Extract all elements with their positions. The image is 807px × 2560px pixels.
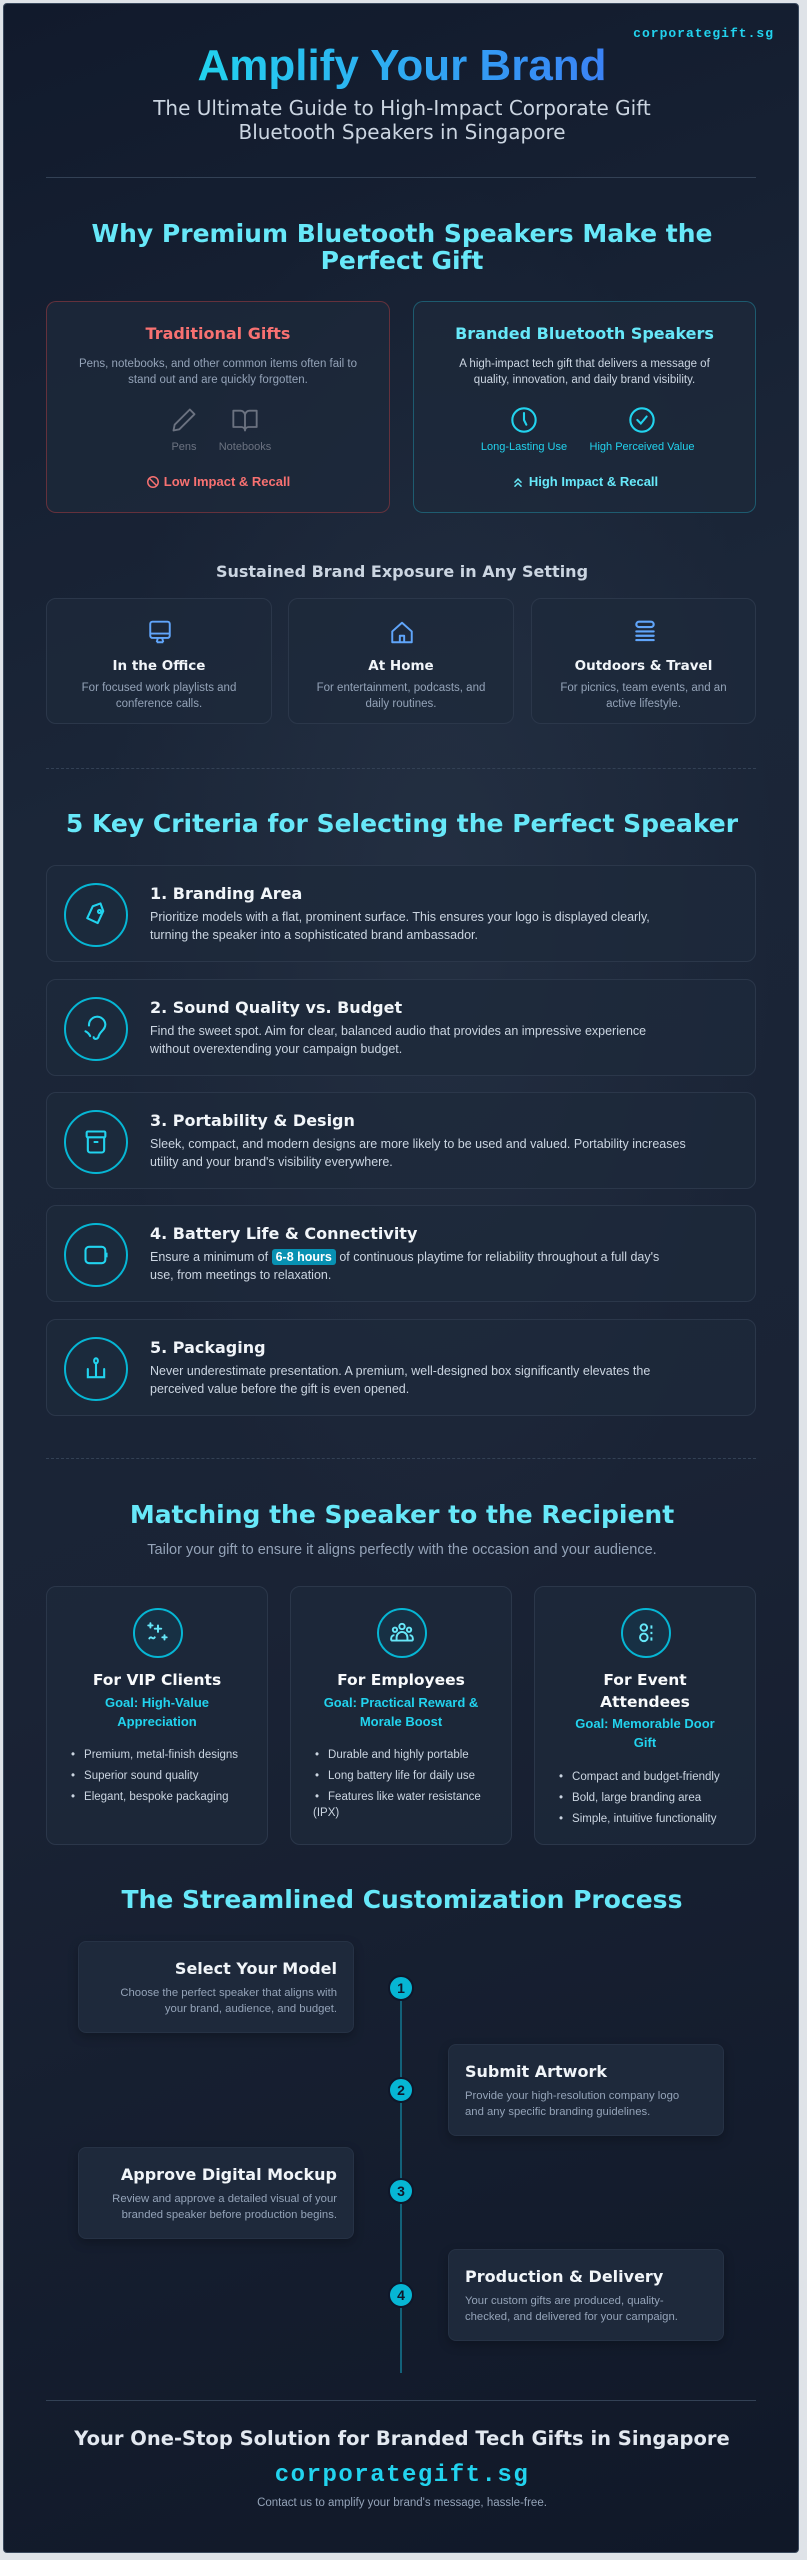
panel: outdoors: active lifestyle. [606,698,681,710]
step 3: Approve Digital Mockup [121,2165,337,2184]
heading: traditional: Traditional Gifts [146,324,290,343]
panel: criterion 5: perceived value before the gift is even opened. [150,1382,409,1396]
panel: employees [290,1586,512,1845]
label: notebooks: Notebooks [219,441,271,453]
step 2: Submit Artwork [465,2062,607,2081]
footer brand: corporategift.sg [275,2462,529,2489]
step 1: your brand, audience, and budget. [165,2003,337,2015]
label: long-lasting: Long-Lasting Use [481,441,567,453]
panel: VIP clients: Goal: High-Value [105,1695,209,1710]
icon: speaker [621,1608,671,1658]
panel: criterion 4: use, from meetings to relaxation. [150,1268,331,1282]
heading: 5 key criteria: 5 Key Criteria for Selecting the Perfect Speaker [66,809,738,838]
icon: tag [64,883,128,947]
marker 4: 4 [397,2287,405,2303]
panel: criterion 1 [46,865,756,962]
panel: VIP clients: Superior sound quality [84,1770,198,1782]
text: home: At Home [368,658,434,674]
icon: monitor [149,620,171,644]
panel: employees: Morale Boost [360,1714,442,1729]
panel: criterion 3: Sleek, compact, and modern designs are more likely to be used and valued. Portability increases [150,1137,686,1151]
panel: criterion 4: 4. Battery Life & Connectivity [150,1224,417,1243]
heading: why premium: Perfect Gift [321,246,483,275]
icon: check [629,407,655,433]
panel: criterion 3: 3. Portability & Design [150,1111,355,1130]
text: traditional desc [79,358,357,386]
step 4: checked, and delivered for your campaign. [465,2311,678,2323]
marker 2: 2 [397,2082,405,2098]
panel: VIP clients: Premium, metal-finish designs [84,1749,238,1761]
panel: VIP clients: Elegant, bespoke packaging [84,1791,229,1803]
panel: criterion 1: 1. Branding Area [150,884,302,903]
panel: event attendees: Bold, large branding area [572,1792,701,1804]
callout: high impact: High Impact & Recall [529,474,658,489]
panel: criterion 3 [46,1092,756,1189]
panel: event attendees: Compact and budget-friendly [572,1771,720,1783]
step 4: Your custom gifts are produced, quality- [465,2295,664,2307]
panel: criterion 3: utility and your brand's visibility everywhere. [150,1155,393,1169]
icon: sound [64,997,128,1061]
icon: battery [64,1223,128,1287]
icon: box [64,1110,128,1174]
panel: employees: Long battery life for daily use [328,1770,475,1782]
panel: criterion 4 [46,1205,756,1302]
panel: criterion 5 [46,1319,756,1416]
marker 1: 1 [397,1980,405,1996]
text: branded desc: quality, innovation, and daily brand visibility. [474,374,695,386]
step 2: and any specific branding guidelines. [465,2106,650,2118]
panel: criterion 1: turning the speaker into a sophisticated brand ambassador. [150,928,478,942]
panel: criterion 4: Ensure a minimum of 6-8 hours of continuous playtime for reliability throughout a full day's [150,1250,659,1264]
panel: employees: Durable and highly portable [328,1749,469,1761]
step 4 [448,2249,724,2341]
label: perceived value: High Perceived Value [590,441,694,453]
text: traditional desc: stand out and are quickly forgotten. [128,374,308,386]
step 3: Review and approve a detailed visual of your [112,2193,337,2205]
subheading: sustained exposure: Sustained Brand Exposure in Any Setting [216,562,588,581]
subtitle [153,96,651,144]
panel: VIP clients: For VIP Clients [93,1671,221,1689]
marker 1 [388,1975,414,2001]
step 1: Select Your Model [175,1959,337,1978]
heading: branded: Branded Bluetooth Speakers [455,324,714,343]
icon: stack [635,620,655,642]
timeline line [400,1984,402,2373]
icon: pen [172,408,196,432]
heading: matching: Matching the Speaker to the Recipient [130,1500,674,1529]
panel: criterion 1: Prioritize models with a flat, prominent surface. This ensures your logo is displayed clearly, [150,910,650,924]
panel: office: conference calls. [116,698,202,710]
step 1 [78,1941,354,2033]
panel: event attendees: Gift [634,1735,656,1750]
heading: process: The Streamlined Customization Process [122,1885,682,1914]
text: matching subtitle: Tailor your gift to ensure it aligns perfectly with the occasion and your audience. [147,1542,657,1558]
step 1: Choose the perfect speaker that aligns with [120,1987,337,1999]
icon: packaging [64,1337,128,1401]
panel: VIP clients: Appreciation [117,1714,197,1729]
panel: criterion 5: Never underestimate presentation. A premium, well-designed box significantly elevates the [150,1364,650,1378]
step 3: branded speaker before production begins. [122,2209,337,2221]
panel: home: daily routines. [366,698,436,710]
text: outdoors: Outdoors & Travel [575,658,712,674]
panel: criterion 2 [46,979,756,1076]
panel: office: For focused work playlists and [82,682,236,694]
text: office: In the Office [113,658,205,674]
icon: sparkles [133,1608,183,1658]
panel: home [288,598,514,724]
panel: home: For entertainment, podcasts, and [317,682,485,694]
icon: home [391,622,413,644]
marker 4 [388,2282,414,2308]
step 2 [448,2044,724,2136]
panel: criterion 2: without overextending your campaign budget. [150,1042,402,1056]
panel: event attendees [534,1586,756,1845]
panel: event attendees: Simple, intuitive functionality [572,1813,716,1825]
heading: why premium: Why Premium Bluetooth Speakers Make the [92,219,712,248]
step 2: Provide your high-resolution company logo [465,2090,679,2102]
callout: low impact: Low Impact & Recall [164,474,290,489]
panel: branded speakers [413,301,756,513]
panel: event attendees: Attendees [600,1693,690,1711]
marker 3: 3 [397,2183,405,2199]
panel: criterion 5: 5. Packaging [150,1338,266,1357]
panel: event attendees: For Event [603,1671,687,1689]
marker 2 [388,2077,414,2103]
panel: employees: Goal: Practical Reward & [324,1695,478,1710]
panel: outdoors [531,598,756,724]
panel: outdoors: For picnics, team events, and an [560,682,727,694]
heading: why premium [92,219,712,275]
text: traditional desc: Pens, notebooks, and other common items often fail to [79,358,357,370]
panel: office [46,598,272,724]
brand tag: corporategift.sg [633,26,774,41]
step 3 [78,2147,354,2239]
icon: users [377,1608,427,1658]
subtitle: The Ultimate Guide to High-Impact Corporate Gift [153,96,651,120]
icon: clock [511,407,537,433]
panel: criterion 2: Find the sweet spot. Aim for clear, balanced audio that provides an impressive experience [150,1024,646,1038]
panel: employees: Features like water resistance (IPX) [313,1791,481,1819]
subtitle: Bluetooth Speakers in Singapore [238,120,566,144]
marker 3 [388,2178,414,2204]
icon: notebook [232,410,258,432]
label: pens: Pens [171,441,197,453]
panel: event attendees: Goal: Memorable Door [575,1716,715,1731]
panel: employees: For Employees [337,1671,465,1689]
panel: criterion 2: 2. Sound Quality vs. Budget [150,998,402,1017]
text: branded desc: A high-impact tech gift that delivers a message of [459,358,710,370]
panel: traditional gifts [46,301,390,513]
footer heading: Your One-Stop Solution for Branded Tech Gifts in Singapore [74,2427,730,2450]
panel: VIP clients [46,1586,268,1845]
footer contact: Contact us to amplify your brand's message, hassle-free. [257,2497,547,2509]
step 4: Production & Delivery [465,2267,663,2286]
text: branded desc [459,358,710,386]
title: Amplify Your Brand [197,41,607,90]
